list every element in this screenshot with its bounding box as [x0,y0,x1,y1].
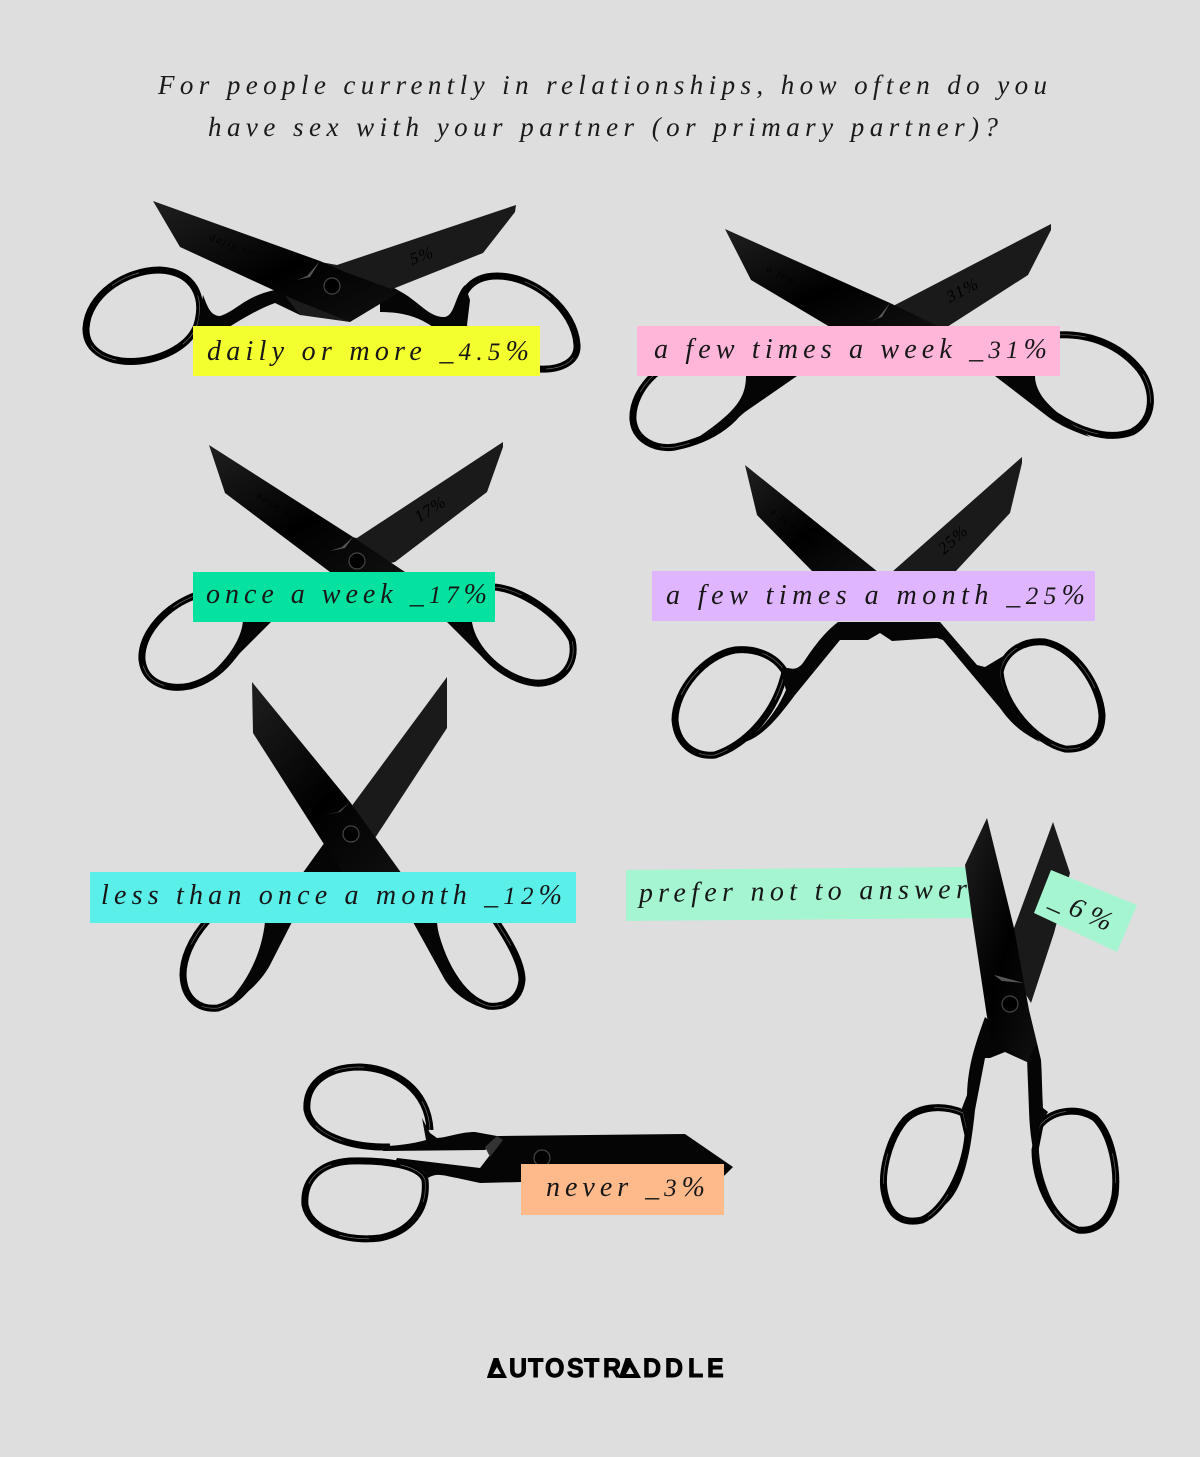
label: a few times a month [652,571,1095,621]
scissors: a few times a month: a few time [768,506,823,552]
scissors: a few times a month [675,457,1102,755]
label: prefer not to answer [626,867,975,921]
scissors: once a week [142,442,573,687]
scissors: a few times a month: 25% [934,521,972,558]
scissors: less than once a month [183,677,522,1010]
label: never [521,1164,724,1215]
scissors: once a week: 17% [411,492,450,526]
label: daily or more: daily or more _4.5% [207,336,529,367]
label: a few times a month: a few times a month _25% [666,580,1085,611]
label: once a week [193,572,495,622]
label: 6 percent: _6% [1044,883,1117,938]
title: have sex with your partner (or primary partner)? [208,112,998,142]
scissors: a few times a week [633,224,1150,448]
logo: Autostraddle: AUTOSTRADDLE [487,1352,724,1383]
title: For people currently in relationships, how often do you [157,70,1047,100]
scissors: once a week: once a [254,490,293,520]
scissors: daily or more [86,201,577,369]
scissors: never [305,1067,733,1239]
label: never: never _3% [546,1172,705,1203]
scissors: daily or more: daily or [208,232,256,259]
title [157,70,1047,142]
scissors: daily or more: 5% [407,242,437,269]
scissors: a few times a week: 31% [942,274,982,307]
label: prefer not to answer: prefer not to answer [637,874,967,909]
label: once a week: once a week _17% [206,579,487,610]
label: a few times a week [637,326,1060,376]
label: 6 percent [1034,870,1137,952]
scissors: a few times a week: a few times [765,264,830,302]
label: daily or more [193,326,540,376]
label: a few times a week: a few times a week _31% [654,334,1047,365]
label: less than once a month [90,872,576,923]
scissors: prefer not to answer [884,818,1116,1230]
label: less than once a month: less than once a month _12% [101,880,562,911]
